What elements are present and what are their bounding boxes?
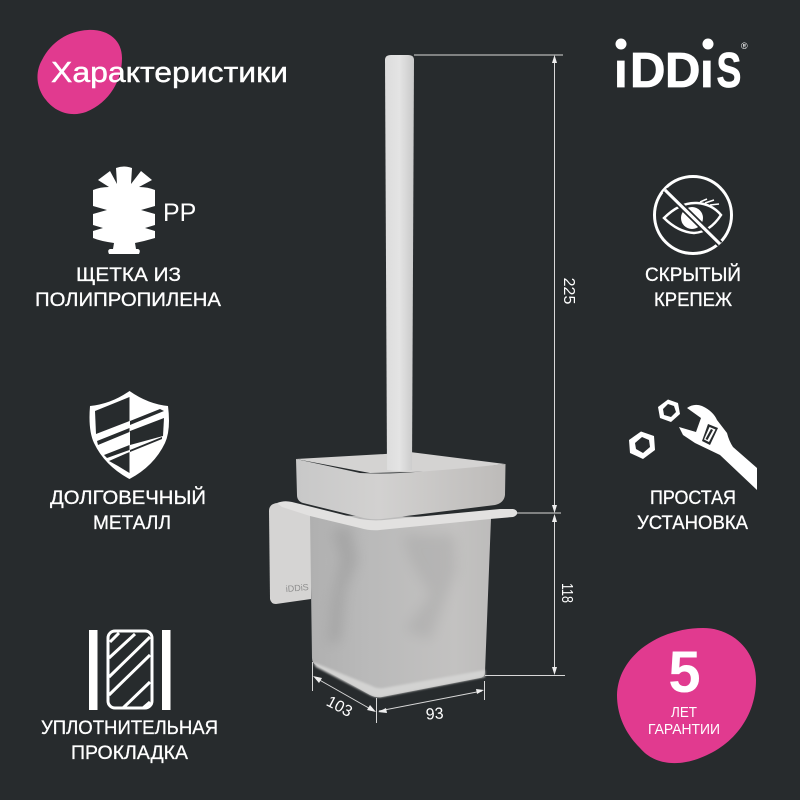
- pink blob: [617, 628, 756, 763]
- feature: gasket: [41, 630, 218, 764]
- dimension 225: 225: [560, 278, 577, 304]
- heading text: Характеристики: [51, 57, 288, 89]
- product: toilet brush holder: [269, 55, 517, 697]
- feature: easy installation: [629, 400, 757, 534]
- number 5: 5: [668, 640, 701, 705]
- label: ЩЕТКА ИЗ: [76, 264, 181, 286]
- label: [50, 485, 206, 534]
- label: МЕТАЛЛ: [93, 512, 171, 534]
- cup body: [310, 515, 491, 697]
- warranty badge: ГАРАНТИИ: [648, 721, 720, 738]
- heading: characteristics: [37, 30, 288, 114]
- icon: gasket: [89, 630, 170, 710]
- label: ПОЛИПРОПИЛЕНА: [35, 289, 221, 311]
- logo: IDDIS: [614, 38, 748, 98]
- logo: IDDIS: ıDDı: [614, 44, 714, 98]
- tray interior: [296, 452, 505, 473]
- brush rod: [385, 55, 414, 471]
- label: [637, 487, 748, 534]
- icon: shield: [90, 391, 169, 479]
- label: ПРОКЛАДКА: [71, 742, 188, 764]
- shelf: [277, 501, 517, 530]
- label: СКРЫТЫЙ: [645, 262, 741, 286]
- tray: [296, 459, 506, 519]
- label: КРЕПЕЖ: [654, 289, 732, 311]
- cup base highlight: [313, 662, 485, 697]
- label: PP: PP: [163, 199, 196, 227]
- dimension 103: 103: [323, 693, 355, 721]
- dimension lines: [312, 55, 577, 724]
- wall plate: [269, 503, 311, 604]
- label: [35, 264, 221, 311]
- arrowheads: [313, 55, 557, 713]
- label: ДОЛГОВЕЧНЫЙ: [50, 485, 206, 509]
- dimension 93: 93: [425, 705, 444, 724]
- pink blob behind heading: [37, 30, 122, 114]
- label: УПЛОТНИТЕЛЬНАЯ: [41, 717, 218, 739]
- logo: IDDIS: ®: [741, 41, 748, 51]
- icon: brush head: [93, 166, 155, 254]
- feature: polypropylene brush: [35, 166, 221, 311]
- icon: crossed eye: [654, 176, 732, 254]
- label: [41, 717, 218, 764]
- feature: durable metal: [50, 391, 206, 534]
- label: ПРОСТАЯ: [650, 487, 736, 509]
- feature: hidden mounting: [645, 176, 741, 311]
- warranty label: ЛЕТ: [671, 704, 697, 721]
- logo on plate: iDDiS: [285, 582, 309, 594]
- icon: wrench and nuts: [629, 400, 757, 490]
- dimension 118: 118: [558, 583, 575, 603]
- label: УСТАНОВКА: [637, 512, 748, 534]
- warranty badge: [617, 628, 756, 763]
- cup smudges: [328, 525, 457, 645]
- logo: IDDIS: S: [716, 44, 741, 98]
- label: [645, 262, 741, 311]
